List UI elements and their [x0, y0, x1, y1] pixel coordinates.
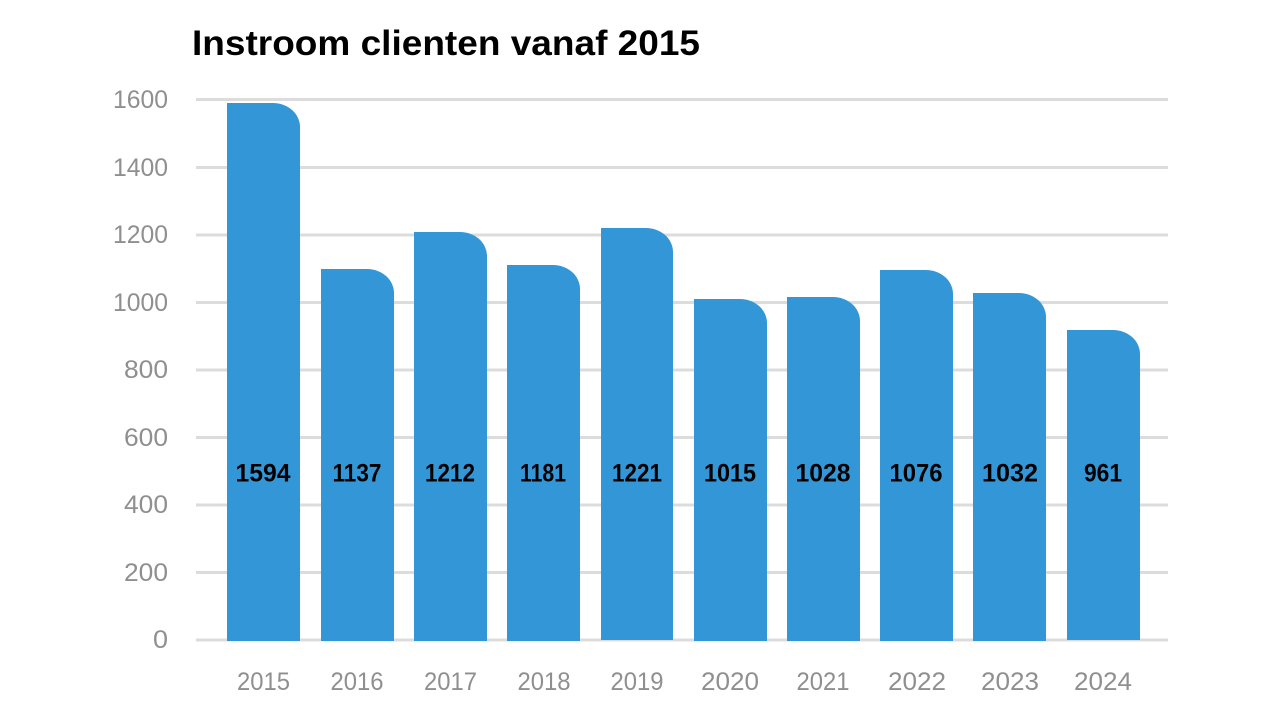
title: Instroom clienten vanaf 2015 — [192, 24, 700, 63]
bar value labels: 1221 — [612, 460, 662, 488]
bar value labels — [236, 460, 1122, 488]
y axis labels: 1400 — [113, 154, 168, 182]
bar value labels: 1015 — [704, 460, 756, 488]
bar value labels: 1594 — [236, 460, 291, 488]
x axis labels: 2019 — [610, 668, 664, 696]
x axis labels: 2023 — [981, 668, 1039, 696]
y axis labels: 200 — [124, 559, 168, 587]
y axis labels — [113, 86, 168, 654]
x axis labels: 2017 — [424, 668, 477, 696]
x axis labels: 2020 — [701, 668, 759, 696]
bar value labels: 1032 — [982, 460, 1038, 488]
bars — [227, 103, 1140, 641]
y axis labels: 400 — [124, 491, 168, 519]
y axis labels: 1000 — [113, 289, 168, 317]
y axis labels: 1200 — [113, 221, 168, 249]
bar value labels: 1076 — [890, 460, 942, 488]
bar value labels: 1212 — [425, 460, 475, 488]
bar chart — [113, 86, 1168, 696]
y axis labels: 600 — [124, 424, 168, 452]
x axis labels — [237, 668, 1132, 696]
x axis labels: 2016 — [330, 668, 384, 696]
x axis labels: 2024 — [1074, 668, 1132, 696]
x axis labels: 2022 — [888, 668, 946, 696]
bar value labels: 1028 — [796, 460, 851, 488]
x axis labels: 2015 — [237, 668, 290, 696]
bar value labels: 961 — [1084, 460, 1122, 488]
y axis labels: 0 — [153, 626, 168, 654]
x axis labels: 2018 — [518, 668, 570, 696]
y axis labels: 1600 — [113, 86, 168, 114]
bar value labels: 1137 — [332, 460, 382, 488]
bar value labels: 1181 — [520, 460, 566, 488]
x axis labels: 2021 — [796, 668, 850, 696]
y axis labels: 800 — [124, 356, 168, 384]
